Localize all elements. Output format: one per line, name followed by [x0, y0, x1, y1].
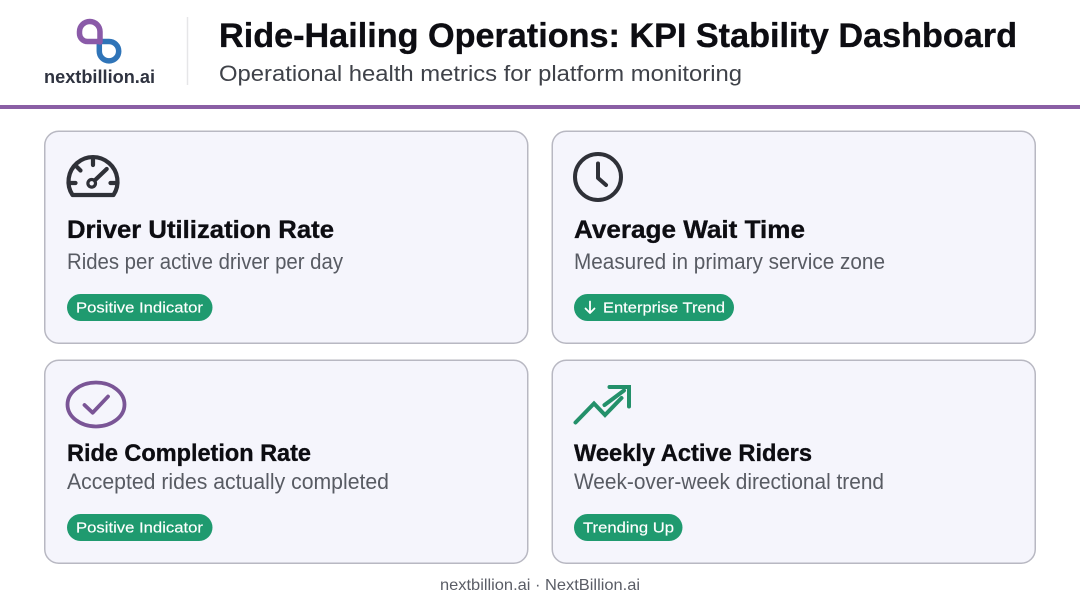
panel: Ride Completion Rate	[45, 360, 528, 563]
description: Accepted rides actually completed	[67, 469, 389, 494]
badge	[574, 294, 734, 321]
description: Week-over-week directional trend	[574, 469, 884, 494]
heading: Average Wait Time	[574, 216, 805, 244]
heading: Weekly Active Riders	[574, 440, 812, 467]
icon: check in oval	[68, 382, 124, 426]
subtitle: Operational health metrics for platform monitoring	[219, 61, 742, 86]
footer: nextbillion.ai · NextBillion.ai	[440, 577, 640, 594]
badge: Trending Up	[583, 520, 674, 536]
badge	[574, 514, 682, 541]
heading: Ride Completion Rate	[67, 440, 311, 467]
badge: Positive Indicator	[76, 300, 203, 316]
badge: Positive Indicator	[76, 520, 203, 536]
header	[0, 17, 1080, 109]
icon: clock	[575, 154, 621, 200]
heading: Driver Utilization Rate	[67, 216, 334, 244]
logo: nextbillion.ai: nextbillion.ai	[44, 67, 155, 87]
title: Ride-Hailing Operations: KPI Stability Dashboard	[219, 17, 1017, 55]
badge: Enterprise Trend	[603, 300, 725, 316]
description: Measured in primary service zone	[574, 249, 885, 274]
panel: Weekly Active Riders	[552, 360, 1035, 563]
icon: speedometer gauge	[68, 157, 118, 195]
badge	[67, 514, 212, 541]
badge	[67, 294, 212, 321]
panel: Driver Utilization Rate	[45, 131, 528, 343]
logo: nextbillion.ai	[44, 21, 155, 87]
icon: trending up arrow	[576, 387, 629, 422]
description: Rides per active driver per day	[67, 249, 343, 274]
panel: Average Wait Time	[552, 131, 1035, 343]
header rule	[0, 105, 1080, 109]
